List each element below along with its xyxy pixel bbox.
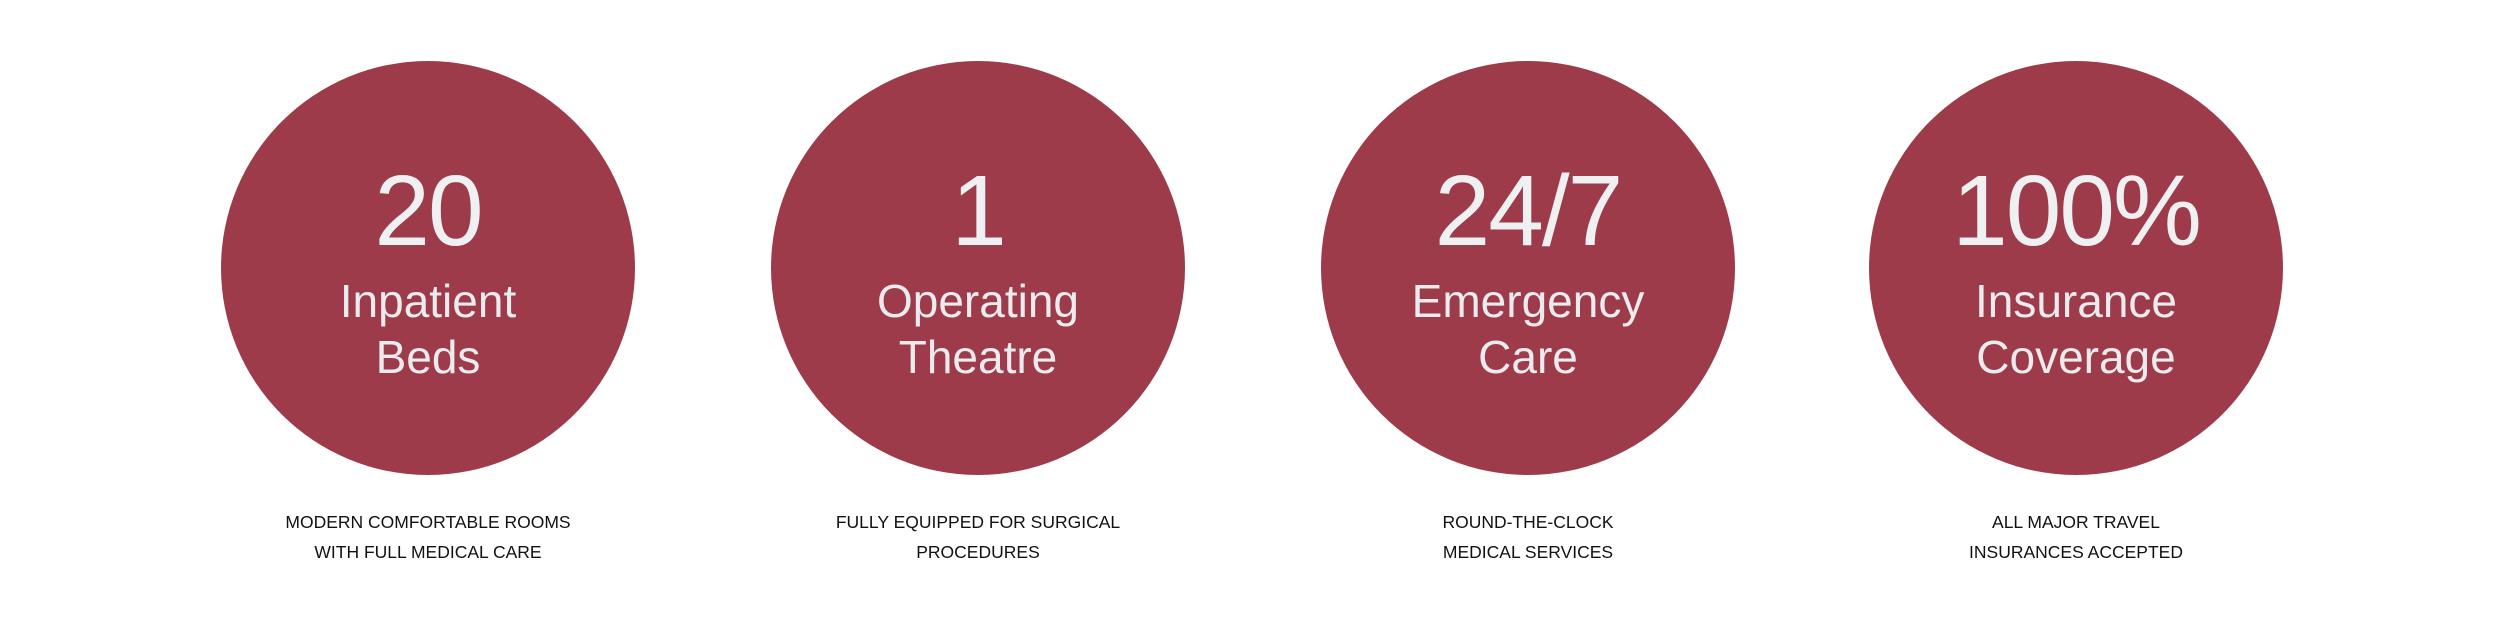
number: 20: 20 (374, 155, 482, 267)
panel: operating theatre (771, 61, 1185, 562)
label: Inpatient Beds: Beds (376, 331, 480, 383)
circle: beds (221, 61, 635, 475)
number: 24/7: 24/7 (1435, 155, 1621, 267)
caption: emergency: ROUND-THE-CLOCK (1442, 512, 1614, 532)
circle: emergency (1321, 61, 1735, 475)
caption: insurance: INSURANCES ACCEPTED (1969, 542, 2183, 562)
panel: insurance coverage (1869, 61, 2283, 562)
caption: insurance: ALL MAJOR TRAVEL (1992, 512, 2160, 532)
label: Insurance Coverage: Coverage (1976, 331, 2176, 383)
caption: emergency: MEDICAL SERVICES (1443, 542, 1613, 562)
label: Emergency Care: Care (1478, 331, 1578, 383)
label: Emergency Care: Emergency (1412, 275, 1644, 327)
number: 100%: 100% (1952, 155, 2200, 267)
label: Insurance Coverage: Insurance (1975, 275, 2177, 327)
panel: inpatient beds (221, 61, 635, 562)
label: Inpatient Beds: Inpatient (340, 275, 516, 327)
label: Operating Theatre: Theatre (899, 331, 1057, 383)
number: 1: 1 (951, 155, 1005, 267)
panel: emergency care (1321, 61, 1735, 562)
circle: theatre (771, 61, 1185, 475)
caption: beds: WITH FULL MEDICAL CARE (314, 542, 542, 562)
caption: theatre: PROCEDURES (916, 542, 1040, 562)
label: Operating Theatre: Operating (877, 275, 1079, 327)
caption: beds: MODERN COMFORTABLE ROOMS (285, 512, 571, 532)
circle: insurance (1869, 61, 2283, 475)
caption: theatre: FULLY EQUIPPED FOR SURGICAL (836, 512, 1120, 532)
